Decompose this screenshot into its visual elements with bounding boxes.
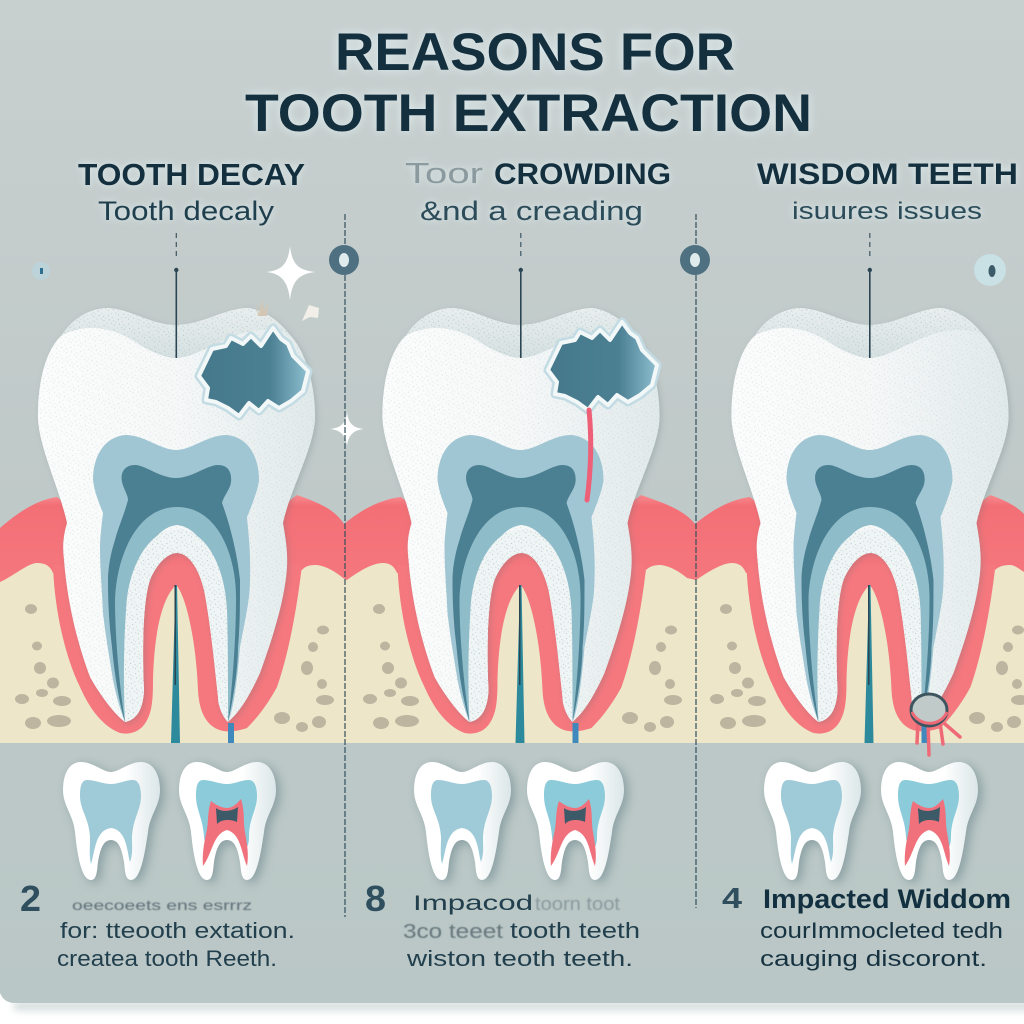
- caption 2: [20, 878, 295, 971]
- caption 3: tooth teeth: [510, 918, 640, 943]
- small teeth pair 3: [764, 762, 978, 880]
- column heading: crowding: CROWDING: [494, 158, 671, 191]
- caption 2: for: tteooth extation.: [60, 918, 295, 943]
- small teeth pair 2: [414, 762, 624, 880]
- icon: cavity with crack: [548, 322, 657, 500]
- small teeth pair 1: [63, 762, 276, 880]
- bone band: [0, 555, 1024, 743]
- caption 3: [365, 878, 640, 971]
- caption 4: Impacted Widdom: [763, 884, 1011, 914]
- caption 4: [722, 883, 1011, 971]
- caption 3: Impacod: [413, 892, 533, 915]
- title: TOOTH EXTRACTION: [245, 84, 812, 143]
- divider 2 with marker: [680, 214, 710, 908]
- caption 2: 2: [20, 878, 41, 919]
- sparkles: [256, 246, 364, 446]
- column heading: wisdom teeth: WISDOM TEETH: [757, 158, 1018, 191]
- title: REASONS FOR: [335, 23, 735, 82]
- caption 3: toorn toot: [535, 894, 620, 914]
- column heading: crowding: [405, 158, 671, 226]
- marker left: [32, 262, 50, 280]
- icon: decay cavity: [199, 328, 308, 416]
- caption 4: cauging discoront.: [760, 946, 987, 971]
- column heading: tooth decay: TOOTH DECAY: [78, 157, 305, 192]
- column heading: wisdom teeth: isuures issues: [792, 198, 982, 225]
- caption 3: 3co teeet: [403, 921, 504, 943]
- tooth 3: wisdom teeth: [731, 233, 1009, 755]
- caption 4: courImmocleted tedh: [760, 918, 1003, 943]
- column heading: tooth decay: Tooth decaly: [98, 196, 275, 226]
- caption 2: createa tooth Reeth.: [57, 946, 277, 971]
- tooth 1: decay: [38, 233, 315, 743]
- tooth 2: crowding: [382, 233, 660, 743]
- column heading: crowding: &nd a creading: [420, 196, 643, 226]
- title: [245, 23, 812, 143]
- caption 2: oeecoeets ens esrrrz: [72, 897, 252, 913]
- gum band: [0, 495, 1024, 582]
- marker right: [974, 254, 1006, 286]
- column heading: tooth decay: [78, 157, 305, 226]
- caption 4: 4: [722, 883, 742, 915]
- caption 3: wiston teoth teeth.: [406, 946, 633, 971]
- caption 3: 8: [365, 878, 386, 919]
- column heading: wisdom teeth: [757, 158, 1018, 225]
- icon: root damage: [911, 694, 960, 755]
- divider 1 with marker: [329, 214, 359, 917]
- column heading: crowding: Toor: [405, 158, 483, 190]
